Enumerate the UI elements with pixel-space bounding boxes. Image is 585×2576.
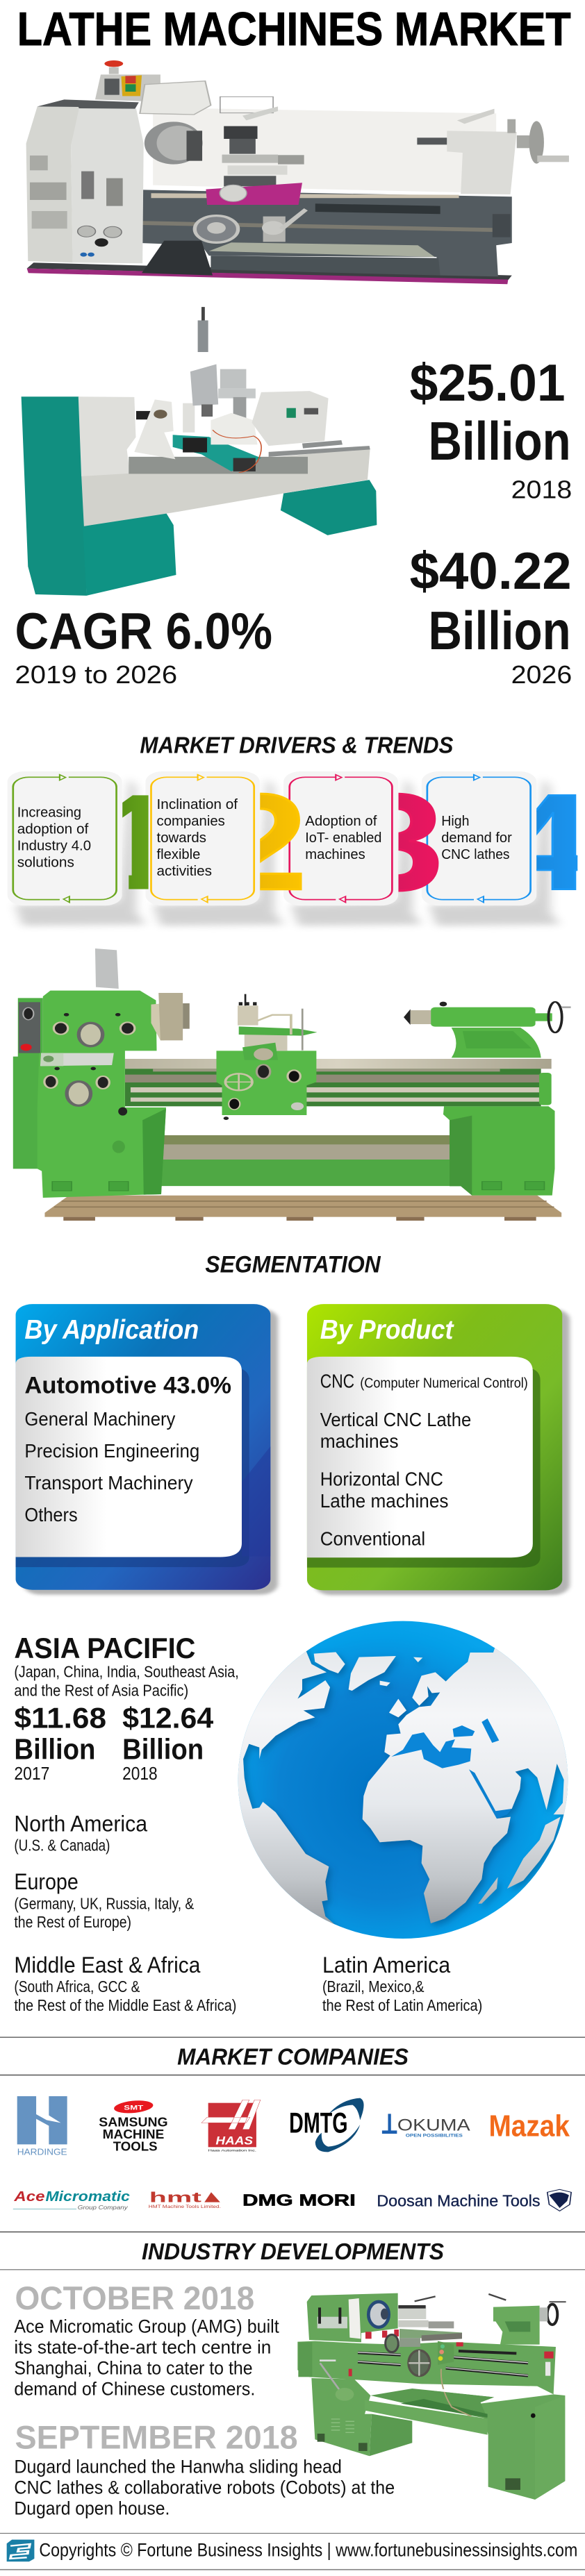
panel: by application: Transport Machinery <box>24 1472 193 1494</box>
illustration: green engine lathe <box>297 2293 566 2500</box>
region: europe <box>14 1870 194 1931</box>
region: asia pacific: ASIA PACIFIC <box>14 1632 195 1664</box>
market drivers section <box>8 732 585 926</box>
region: latin america: (Brazil, Mexico,& <box>322 1978 425 1996</box>
panel: by application: Precision Engineering <box>24 1440 199 1462</box>
development: September 2018: Dugard open house. <box>14 2498 170 2519</box>
logo: Haas <box>201 2100 261 2152</box>
driver card 2: Inclination of <box>157 796 238 812</box>
market value 2018 <box>410 353 572 503</box>
region: latin america: the Rest of Latin America) <box>322 1996 482 2014</box>
logo: Okuma <box>382 2114 470 2138</box>
driver card 1: Industry 4.0 <box>17 837 91 853</box>
region: north america: (U.S. & Canada) <box>14 1837 110 1855</box>
driver card 2 <box>145 771 260 905</box>
development: October 2018: Ace Micromatic Group (AMG) built <box>14 2316 279 2336</box>
logo: Samsung Machine Tools: SMT <box>124 2104 144 2111</box>
driver card 2: towards <box>157 829 206 845</box>
panel: by product: Horizontal CNC <box>320 1468 443 1490</box>
development: October 2018: OCTOBER 2018 <box>15 2280 254 2316</box>
driver card 3: machines <box>305 846 365 862</box>
logo: Okuma: OPEN POSSIBILITIES <box>406 2133 463 2138</box>
heading: segmentation: SEGMENTATION <box>205 1252 381 1278</box>
development: October 2018 <box>14 2280 279 2399</box>
logo: Haas: HAAS <box>215 2134 253 2147</box>
region: north america <box>14 1812 147 1855</box>
region: asia pacific <box>14 1632 239 1784</box>
panel: by product: Lathe machines <box>320 1490 448 1512</box>
region: asia pacific: $12.64 <box>122 1702 213 1734</box>
development: September 2018 <box>14 2420 395 2519</box>
panel: by product: machines <box>320 1430 399 1452</box>
development: October 2018: demand of Chinese customers. <box>14 2378 255 2399</box>
region: asia pacific: and the Rest of Asia Pacific) <box>14 1682 188 1699</box>
driver card 3 <box>283 771 398 905</box>
panel: by product: Vertical CNC Lathe <box>320 1409 471 1430</box>
market value 2026 <box>410 542 572 689</box>
industry developments section <box>0 2232 585 2570</box>
region: middle east and africa: (South Africa, GCC & <box>14 1978 140 1996</box>
CAGR: CAGR 6.0% <box>15 603 272 660</box>
logo: Ace Micromatic: Micromatic <box>46 2188 130 2204</box>
development: September 2018: Dugard launched the Hanwha sliding head <box>14 2457 342 2477</box>
logo: Ace Micromatic: Group Company <box>78 2205 128 2211</box>
region: latin america: Latin America <box>322 1953 450 1978</box>
driver card 2: activities <box>157 862 212 878</box>
panel: by product: By Product <box>320 1314 454 1344</box>
logo: Samsung Machine Tools <box>99 2099 168 2154</box>
panel: by product <box>307 1304 570 1595</box>
logo: Ace Micromatic <box>13 2188 130 2211</box>
card shadows <box>15 778 560 926</box>
CAGR: 2019 to 2026 <box>15 660 177 689</box>
panel: by application: Others <box>24 1504 78 1525</box>
region: asia pacific: (Japan, China, India, Southeast Asia, <box>14 1663 239 1681</box>
region: middle east and africa <box>14 1953 236 2014</box>
development: October 2018: its state-of-the-art tech centre in <box>14 2336 271 2357</box>
region: asia pacific: Billion <box>14 1733 95 1766</box>
logo: HMT: HMT Machine Tools Limited. <box>149 2204 221 2209</box>
footer logo <box>7 2540 34 2561</box>
logo: HMT <box>149 2189 221 2209</box>
driver card 4: demand for <box>441 829 512 845</box>
logo: Ace Micromatic: Ace <box>14 2188 44 2204</box>
panel: by application: Automotive 43.0% <box>24 1373 231 1398</box>
numeral 2: 2 <box>215 767 307 919</box>
logo: Samsung Machine Tools: SAMSUNG <box>99 2116 168 2130</box>
illustration: teal CNC wood lathe <box>22 307 377 596</box>
logo: Hardinge <box>17 2096 67 2157</box>
heading: market companies: MARKET COMPANIES <box>177 2043 409 2070</box>
driver card 4 <box>422 771 536 905</box>
numeral 3: 3 <box>352 767 443 919</box>
key figures section <box>15 307 572 689</box>
driver card 2: companies <box>157 812 225 828</box>
region: middle east and africa: the Rest of the Middle East & Africa) <box>14 1996 236 2014</box>
panel: by product: Conventional <box>320 1528 425 1550</box>
driver card 2: flexible <box>157 846 200 862</box>
logo: Okuma: OKUMA <box>397 2116 470 2134</box>
region: asia pacific: Billion <box>122 1733 204 1766</box>
region: europe: Europe <box>14 1870 79 1894</box>
region: middle east and africa: Middle East & Africa <box>14 1953 201 1978</box>
driver card 1: solutions <box>17 854 74 870</box>
driver card 1: Increasing <box>17 804 81 820</box>
illustration: grey and magenta bench lathe <box>26 60 569 284</box>
numeral 1: 1 <box>103 765 172 919</box>
region: asia pacific: 2017 <box>14 1763 49 1784</box>
region: latin america <box>322 1953 482 2014</box>
driver card 1: adoption of <box>17 821 88 837</box>
region: asia pacific: 2018 <box>122 1763 158 1784</box>
globe <box>236 1621 570 1939</box>
logo: Samsung Machine Tools: TOOLS <box>113 2140 158 2154</box>
logo: Samsung Machine Tools: MACHINE <box>103 2127 164 2141</box>
development: October 2018: Shanghai, China to cater to the <box>14 2357 253 2378</box>
driver card 4: High <box>441 812 470 828</box>
regional section <box>14 1632 482 2014</box>
panel: by application: General Machinery <box>24 1408 175 1430</box>
driver card 3: IoT- enabled <box>305 829 381 845</box>
region: asia pacific: $11.68 <box>14 1702 106 1734</box>
panel: by application: By Application <box>24 1314 199 1344</box>
logo: DMG Mori: DMG MORI <box>242 2191 356 2209</box>
logo: Haas: Haas Automation Inc. <box>208 2150 256 2152</box>
panel: by application <box>16 1304 278 1595</box>
panel: by product: CNC <box>320 1370 354 1392</box>
driver card 1 <box>8 771 122 905</box>
logo: DMTG: DMTG <box>289 2107 347 2139</box>
logo: HMT: hmt <box>149 2189 201 2205</box>
development: September 2018: SEPTEMBER 2018 <box>15 2420 298 2456</box>
region: europe: the Rest of Europe) <box>14 1914 131 1931</box>
CAGR <box>15 603 272 689</box>
region: europe: (Germany, UK, Russia, Italy, & <box>14 1895 194 1912</box>
segmentation section <box>16 1252 570 1595</box>
logo: DMTG <box>289 2098 364 2152</box>
driver card 4: CNC lathes <box>441 846 510 862</box>
top section <box>17 3 571 284</box>
region: north america: North America <box>14 1812 147 1837</box>
driver card 3: Adoption of <box>305 812 377 828</box>
illustration: green lathe on wooden pallet <box>13 948 571 1221</box>
market companies section <box>0 2036 585 2211</box>
logo: Hardinge: HARDINGE <box>17 2147 67 2157</box>
